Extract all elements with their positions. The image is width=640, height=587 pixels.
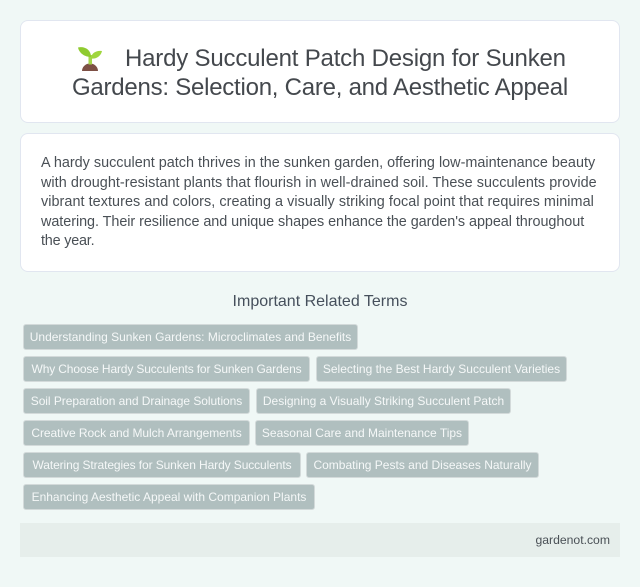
text block: description <box>41 155 597 249</box>
tag: Why Choose Hardy Succulents for Sunken Gardens <box>32 362 301 376</box>
tag <box>23 484 315 510</box>
tag <box>23 356 310 382</box>
tag <box>256 388 511 414</box>
icon: seedling <box>78 47 102 71</box>
title: Gardens: Selection, Care, and Aesthetic Appeal <box>72 74 568 101</box>
tag: Soil Preparation and Drainage Solutions <box>31 394 242 408</box>
tag <box>23 420 250 446</box>
tag: Enhancing Aesthetic Appeal with Companion Plants <box>32 490 306 504</box>
text block: description: with drought-resistant plants that flourish in well-drained soil. These succulents provide <box>41 175 597 191</box>
text block: description: the year. <box>41 233 94 249</box>
title <box>72 45 568 101</box>
title: Hardy Succulent Patch Design for Sunken <box>125 45 566 72</box>
tag: Combating Pests and Diseases Naturally <box>313 458 532 472</box>
panel: tags <box>23 324 567 510</box>
tag: Creative Rock and Mulch Arrangements <box>31 426 242 440</box>
panel: title card <box>20 20 620 123</box>
tag: Watering Strategies for Sunken Hardy Succulents <box>32 458 291 472</box>
tag <box>316 356 567 382</box>
tag: Seasonal Care and Maintenance Tips <box>262 426 462 440</box>
tag: Designing a Visually Striking Succulent Patch <box>263 394 504 408</box>
text block: description: vibrant textures and colors, creating a visually striking focal point that requires minimal <box>41 194 594 210</box>
panel: description <box>20 133 620 272</box>
text block: description: A hardy succulent patch thrives in the sunken garden, offering low-maintenance beauty <box>41 155 595 171</box>
tag <box>23 452 301 478</box>
tag: Selecting the Best Hardy Succulent Varieties <box>323 362 560 376</box>
text block: description: watering. Their resilience and unique shapes enhance the garden's appeal throughout <box>41 214 584 230</box>
heading: related terms: Important Related Terms <box>233 293 407 310</box>
tag <box>255 420 469 446</box>
tag <box>23 324 358 350</box>
footer <box>20 523 620 557</box>
tag <box>306 452 539 478</box>
footer credit: gardenot.com <box>535 533 610 547</box>
tag <box>23 388 250 414</box>
tag: Understanding Sunken Gardens: Microclimates and Benefits <box>30 330 351 344</box>
